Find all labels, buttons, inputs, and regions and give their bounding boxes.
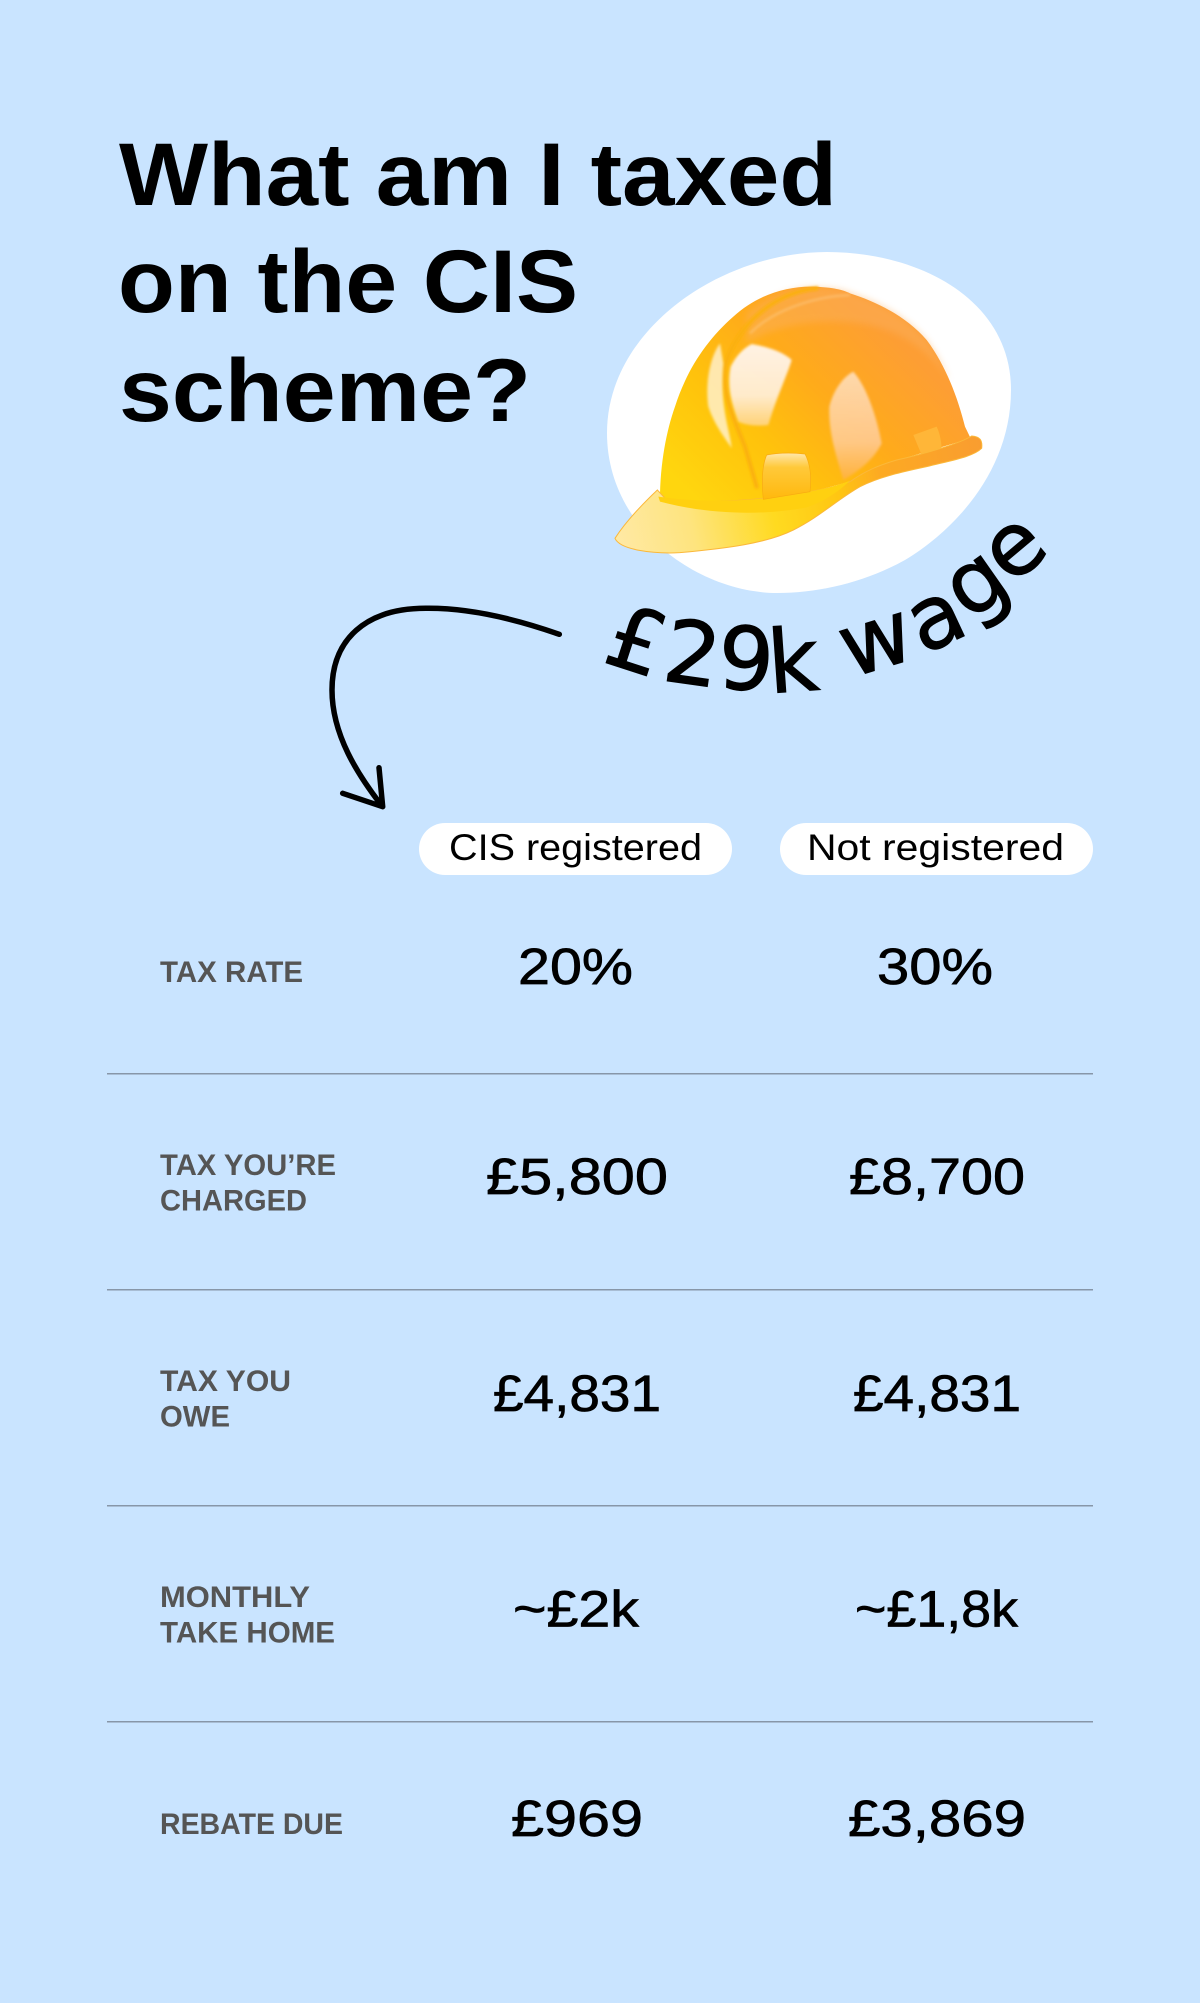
row: monthly take home bbox=[160, 1580, 1019, 1650]
title: scheme? bbox=[119, 340, 531, 440]
title bbox=[118, 124, 837, 440]
row: tax you're charged: TAX YOU’RE bbox=[160, 1149, 336, 1182]
row: tax rate: 20% bbox=[518, 938, 633, 995]
hat brim band bbox=[658, 481, 850, 513]
pill: Not registered: Not registered bbox=[807, 827, 1064, 868]
row: monthly take home: ~£1,8k bbox=[855, 1580, 1019, 1638]
row: tax you're charged: £5,800 bbox=[486, 1148, 668, 1205]
row: monthly take home: MONTHLY bbox=[160, 1581, 310, 1614]
white blob behind helmet bbox=[607, 252, 1011, 593]
row: tax you owe: £4,831 bbox=[493, 1365, 661, 1422]
row: rebate due: £3,869 bbox=[848, 1790, 1026, 1847]
title: What am I taxed bbox=[119, 124, 837, 224]
pill: CIS registered bbox=[419, 823, 732, 875]
row: tax rate bbox=[160, 938, 993, 995]
hat top shading bbox=[747, 287, 950, 382]
row: tax you're charged: £8,700 bbox=[849, 1148, 1025, 1205]
hat upper ridge bbox=[750, 295, 850, 333]
icon: yellow hard hat bbox=[615, 287, 982, 553]
row: rebate due bbox=[160, 1790, 1026, 1847]
row: tax rate: TAX RATE bbox=[160, 956, 303, 989]
row: tax you're charged: CHARGED bbox=[160, 1184, 307, 1218]
row: tax you owe: TAX YOU bbox=[160, 1365, 291, 1398]
hat clip tab bbox=[762, 453, 811, 499]
row: rebate due: REBATE DUE bbox=[160, 1808, 343, 1841]
hat main highlight bbox=[729, 344, 792, 426]
hat brim bbox=[615, 436, 982, 553]
row: rebate due: £969 bbox=[511, 1790, 643, 1847]
pill: CIS registered: CIS registered bbox=[449, 827, 702, 868]
pill: Not registered bbox=[780, 823, 1093, 875]
hat right highlight bbox=[829, 372, 882, 480]
row: tax you owe bbox=[160, 1365, 1021, 1434]
hat left highlight bbox=[707, 343, 732, 448]
row: tax you're charged bbox=[160, 1148, 1025, 1218]
row: monthly take home: TAKE HOME bbox=[160, 1616, 335, 1650]
title: on the CIS bbox=[118, 231, 578, 331]
hat dome bbox=[660, 287, 971, 505]
row: tax you owe: £4,831 bbox=[853, 1365, 1021, 1422]
curved wage label: £29k wage bbox=[595, 490, 1066, 714]
row: monthly take home: ~£2k bbox=[513, 1580, 640, 1638]
hat ridge bbox=[724, 288, 817, 487]
hat right tab bbox=[913, 427, 942, 455]
row: tax you owe: OWE bbox=[160, 1400, 230, 1434]
row: tax rate: 30% bbox=[877, 938, 993, 995]
arrow bbox=[332, 608, 559, 807]
